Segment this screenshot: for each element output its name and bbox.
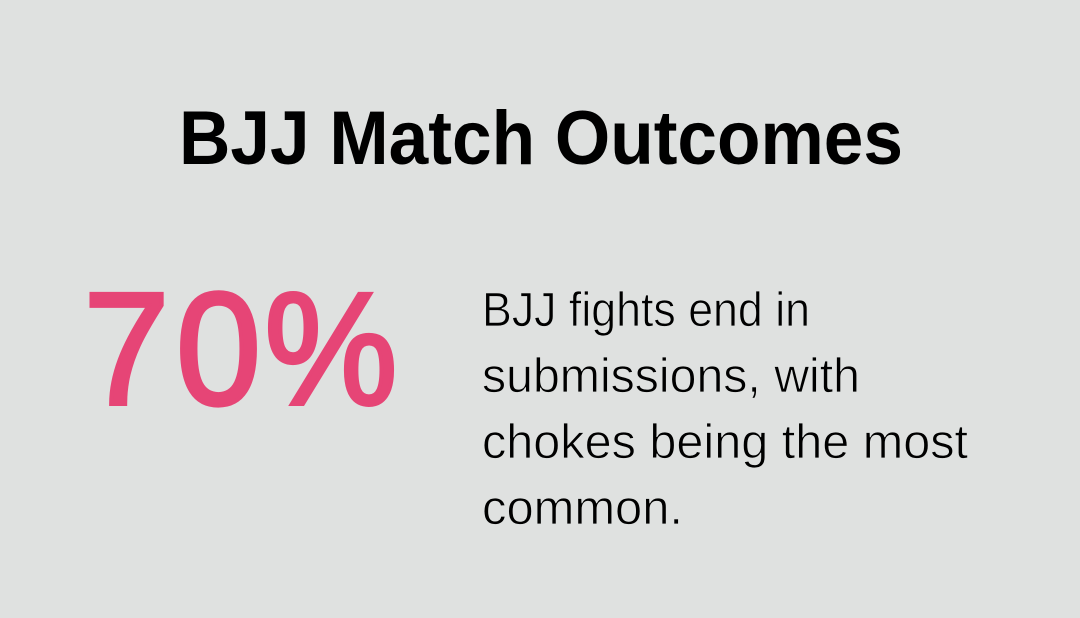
big statistic: 70% — [84, 259, 398, 438]
big statistic: 70%: % — [264, 259, 398, 438]
title: BJJ Match Outcomes — [179, 96, 903, 181]
big statistic: 70%: 0 — [176, 259, 261, 438]
description text: common. — [482, 482, 683, 535]
description text: chokes being the most — [482, 416, 968, 469]
description text — [482, 284, 968, 535]
description text: submissions, with — [482, 350, 860, 403]
big statistic: 70%: 7 — [84, 259, 170, 438]
description text: BJJ fights end in — [482, 284, 810, 337]
